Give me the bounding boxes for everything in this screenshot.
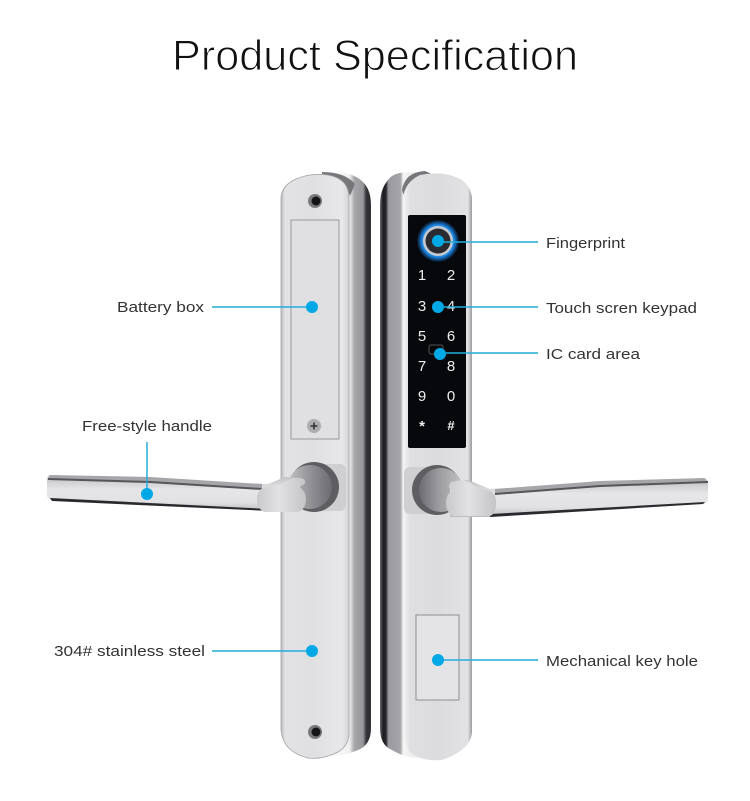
callout: touch screen keypad: [432, 300, 697, 317]
callout: fingerprint: Fingerprint: [546, 235, 626, 252]
keypad digits: 7: [418, 358, 426, 375]
keypad digits: 2: [447, 267, 455, 284]
right panel top bevel: [402, 171, 432, 196]
left panel side edge: [330, 173, 371, 756]
keypad digits: 6: [447, 328, 455, 345]
top screw hole: [308, 194, 322, 208]
right rosette shadow: [404, 467, 450, 514]
right lever bar: [450, 478, 708, 517]
fingerprint ring: [417, 220, 459, 262]
keypad digits: 3: [418, 298, 426, 315]
left lever block: [257, 478, 306, 512]
callout: battery box: [117, 299, 318, 316]
title: Product Specification: [172, 32, 578, 80]
keypad digits: 9: [418, 388, 426, 405]
callout: stainless steel: [54, 643, 318, 660]
cover screw: [307, 419, 321, 433]
keypad screen: [408, 215, 466, 448]
left panel face: [281, 174, 349, 758]
keypad digits: #: [447, 418, 455, 433]
keypad digits: 8: [447, 358, 455, 375]
keypad digits: 0: [447, 388, 455, 405]
key hole cover: [416, 615, 459, 700]
right panel side edge: [380, 172, 420, 758]
callout: free-style handle: Free-style handle: [82, 418, 212, 435]
right lock panel: [380, 171, 472, 760]
callout: battery box: Battery box: [117, 299, 205, 316]
left rosette shadow: [300, 464, 346, 511]
left panel top bevel: [322, 172, 355, 196]
keypad digits: [418, 267, 455, 435]
right lever top stripe: [495, 481, 708, 495]
right lever bottom edge: [490, 502, 705, 517]
left lever bar: [47, 475, 300, 511]
keypad digits: *: [419, 418, 425, 435]
right lever block: [446, 480, 496, 516]
keypad digits: 4: [447, 298, 455, 315]
left handle: [47, 462, 346, 512]
right panel face: [403, 173, 472, 760]
callout: mechanical key hole: [432, 653, 698, 670]
bottom screw hole: [308, 725, 322, 739]
left lock panel: [281, 172, 371, 758]
right rosette: [412, 465, 463, 515]
right lever top band: [495, 478, 708, 495]
right handle: [404, 465, 708, 517]
callout: free-style handle: [82, 418, 212, 500]
left lever top band: [48, 475, 262, 489]
left rosette: [288, 462, 339, 512]
left lever top stripe: [48, 478, 262, 490]
left lever bottom edge: [50, 498, 270, 511]
callout: IC card area: IC card area: [546, 346, 641, 363]
callout: stainless steel: 304# stainless steel: [54, 643, 205, 660]
keypad digits: 5: [418, 328, 426, 345]
callout: IC card area: [434, 346, 641, 363]
battery cover: [291, 220, 339, 439]
card icon: [429, 345, 443, 354]
callout: touch screen keypad: Touch scren keypad: [546, 300, 697, 317]
keypad digits: 1: [418, 267, 426, 284]
callout: mechanical key hole: Mechanical key hole: [546, 653, 698, 670]
callout: fingerprint: [432, 235, 626, 252]
